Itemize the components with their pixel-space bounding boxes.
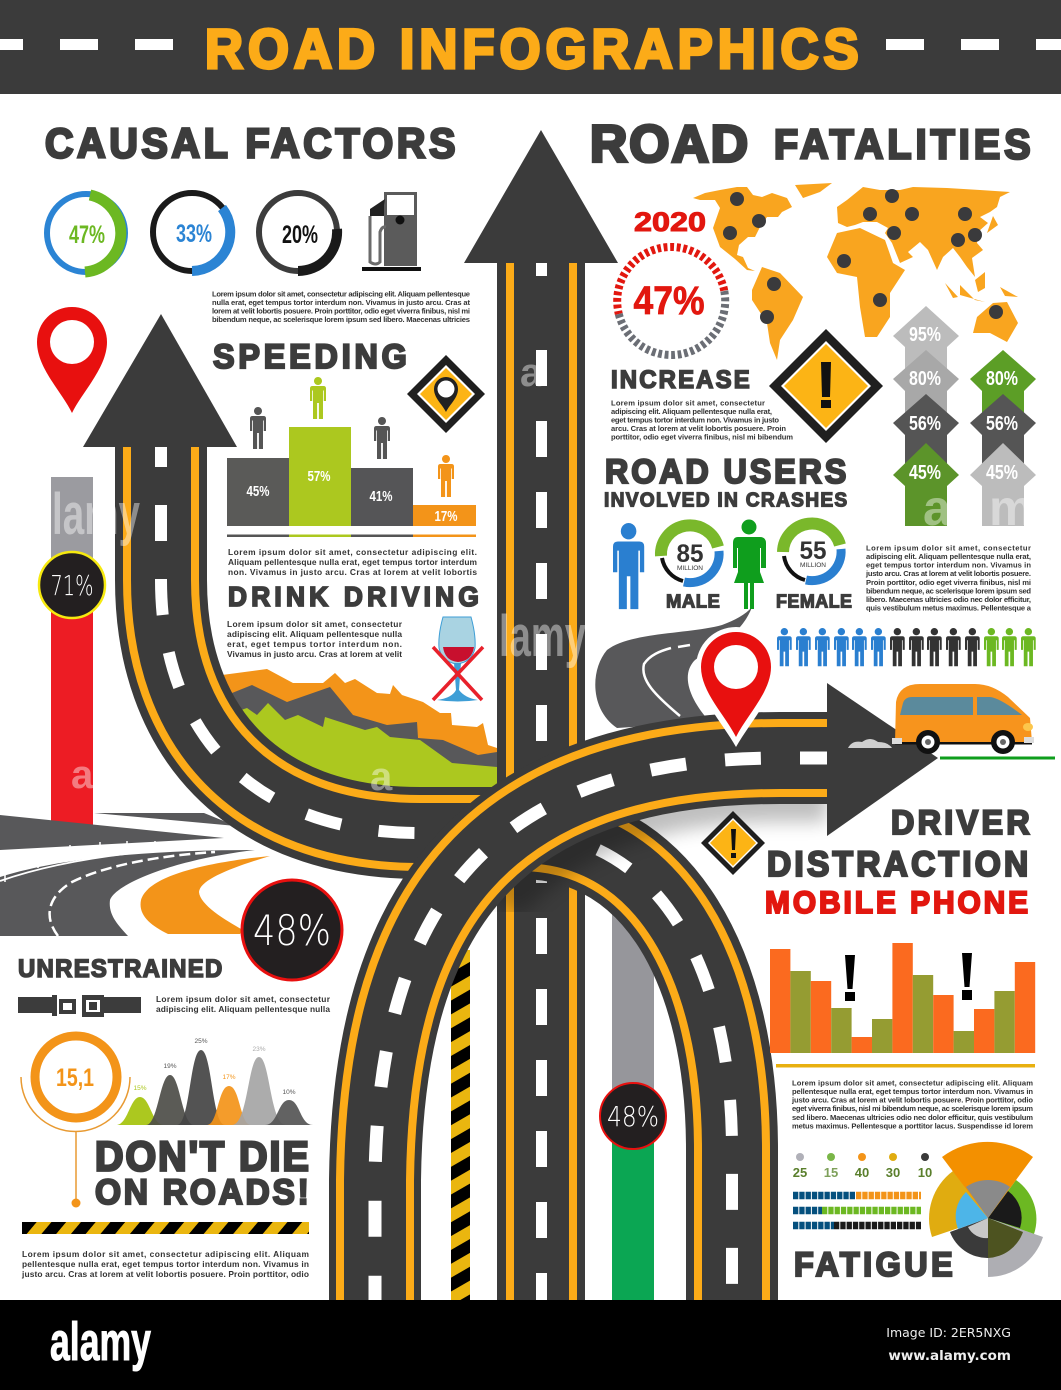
radial gauge: 47% bbox=[617, 247, 725, 355]
footer logo: alamy bbox=[50, 1312, 151, 1372]
text block: unrestrained bbox=[156, 994, 331, 1014]
text block: bottom left bbox=[21, 1249, 309, 1279]
icon: seat belt bbox=[18, 995, 141, 1017]
text block: speeding: Lorem ipsum dolor sit amet, consectetur adipiscing elit. bbox=[228, 547, 477, 557]
heading: road users bbox=[604, 453, 847, 512]
ring gauge: 15,1: 15,1 bbox=[56, 1064, 94, 1092]
heading: speeding: SPEEDING bbox=[213, 338, 407, 376]
heading: fatigue: FATIGUE bbox=[794, 1246, 953, 1284]
text block: causal factors: Lorem ipsum dolor sit amet, consectetur adipiscing elit. Aliquam pellentesque bbox=[212, 290, 470, 298]
peak chart: 15% bbox=[133, 1085, 147, 1092]
bar chart: speeding: 41% bbox=[370, 488, 392, 505]
peak chart: 19% bbox=[163, 1063, 177, 1070]
text block: bottom left: justo arcu. Cras at lorem at velit lobortis posuere. Proin porttitor, odio bbox=[21, 1269, 309, 1279]
sub-heading: mobile phone: MOBILE PHONE bbox=[765, 884, 1028, 920]
watermark letters bbox=[52, 351, 1047, 799]
legend: fatigue values: 15 bbox=[824, 1165, 838, 1180]
bar chart: speeding: 17% bbox=[434, 508, 458, 525]
heading: causal factors: CAUSAL FACTORS bbox=[45, 120, 455, 167]
text block: increase: arcu. Cras at lorem at velit lobortis posuere. Proin bbox=[611, 424, 786, 433]
icon: fuel pump bbox=[362, 192, 421, 271]
slogan: don't die on roads: DON'T DIE bbox=[95, 1133, 309, 1180]
donut: 47% bbox=[47, 194, 125, 272]
text block: driver distraction: sed libero. Maecenas ultricies odio nec dolor efficitur, quis vestibulum bbox=[792, 1113, 1033, 1122]
title: ROAD INFOGRAPHICS bbox=[205, 19, 859, 81]
peak chart: 17% bbox=[222, 1074, 236, 1081]
footer url: www.alamy.com bbox=[888, 1348, 1011, 1364]
text block: driver distraction: metus maximus. Pellentesque a porttitor lacus. Suspendisse id lorem bbox=[792, 1121, 1033, 1130]
watermark letters: a bbox=[71, 753, 94, 797]
text block: road users: eget tempus tortor interdum non. Vivamus in bbox=[866, 561, 1031, 570]
female gauge: 55 bbox=[800, 537, 827, 565]
orange road curve bbox=[141, 856, 270, 934]
icon: red pin with white outline bbox=[696, 627, 776, 747]
icon: male figure bbox=[613, 523, 644, 609]
text block: road users: Lorem ipsum dolor sit amet, consectetur bbox=[866, 544, 1031, 552]
text block: unrestrained: adipiscing elit. Aliquam pellentesque nulla bbox=[156, 1004, 330, 1014]
text block: driver distraction: eget viverra finibus, nisl mi bibendum neque, ac scelerisque lorem ipsum bbox=[792, 1104, 1033, 1113]
legend: fatigue values: 40 bbox=[855, 1165, 869, 1180]
polar chart: fatigue bbox=[929, 1142, 1043, 1277]
text block: causal factors bbox=[212, 290, 470, 324]
peak chart: 23% bbox=[252, 1046, 266, 1053]
landscape: hills bbox=[220, 669, 497, 790]
heading: driver distraction bbox=[765, 804, 1030, 920]
text block: drink driving: erat, eget tempus tortor interdum non. bbox=[227, 639, 402, 649]
segmented progress bars bbox=[793, 1196, 921, 1226]
text block: increase: adipiscing elit. Aliquam pellentesque nulla erat, bbox=[611, 407, 772, 416]
bar chart: speeding bbox=[227, 377, 476, 537]
text block: causal factors: lorem at velit lobortis posuere. Proin porttitor, odio eget viverra finibus, nisl mi bbox=[212, 306, 470, 316]
watermark letters: lamy bbox=[52, 482, 140, 547]
text block: causal factors: nulla erat, eget tempus tortor interdum non. Vivamus in justo arcu. Cras at bbox=[212, 298, 470, 307]
text block: increase: eget tempus tortor interdum non. Vivamus in justo bbox=[611, 416, 779, 424]
heading: road fatalities: ROAD bbox=[590, 114, 748, 172]
donut: 33% bbox=[153, 193, 231, 271]
text block: driver distraction bbox=[791, 1078, 1033, 1130]
text block: bottom left: Lorem ipsum dolor sit amet, consectetur adipiscing elit. Aliquam bbox=[22, 1249, 309, 1259]
slogan: don't die on roads: ON ROADS! bbox=[95, 1173, 309, 1212]
sub-heading: involved in crashes: INVOLVED IN CRASHES bbox=[604, 489, 847, 512]
arrow stack: column one bbox=[893, 306, 959, 526]
text block: causal factors: bibendum neque, ac scelerisque lorem ipsum sed libero. Maecenas ultricies bbox=[212, 315, 470, 324]
label: male: MALE bbox=[666, 590, 720, 611]
text block: road users: Proin porttitor, odio eget viverra finibus, nisl mi bbox=[866, 578, 1031, 587]
male gauge: 85 bbox=[676, 540, 704, 568]
arrow stack: column one: 56% bbox=[909, 413, 941, 435]
watermark letters: mi bbox=[989, 480, 1047, 536]
watermark letters: a bbox=[370, 755, 393, 799]
text block: road users: bibendum neque, ac scelerisque lorem ipsum sed bbox=[866, 586, 1031, 595]
heading: road users: ROAD USERS bbox=[605, 453, 846, 491]
header road banner bbox=[0, 0, 1061, 94]
text block: road users: libero. Maecenas ultricies odio nec dolor efficitur, bbox=[866, 595, 1031, 604]
arrow stack: column two: 45% bbox=[986, 462, 1018, 484]
gauge circle: 48% large bbox=[242, 880, 342, 980]
roadside highway scene bbox=[0, 813, 255, 936]
small background road bbox=[595, 607, 752, 728]
footer image id: Image ID: 2ER5NXG bbox=[886, 1325, 1011, 1340]
bar chart: driver distraction bbox=[770, 943, 1035, 1068]
footer band bbox=[0, 1300, 1061, 1390]
year 2020: 2020 bbox=[634, 207, 706, 237]
people row bbox=[777, 628, 1036, 666]
arrow stack: column one: 95% bbox=[909, 324, 941, 346]
donut: 20% bbox=[259, 193, 337, 271]
ring gauge: 15,1 bbox=[21, 1036, 130, 1208]
text block: speeding: non. Vivamus in justo arcu. Cras at lorem at velit lobortis bbox=[228, 567, 477, 577]
label: female: FEMALE bbox=[776, 590, 852, 612]
map markers bbox=[723, 189, 1003, 324]
arrow stack: column two bbox=[970, 350, 1036, 526]
arrow stack: column one: 45% bbox=[909, 462, 941, 484]
male gauge: MILLION bbox=[677, 565, 703, 572]
van with smoke bbox=[848, 684, 1055, 760]
text block: road users bbox=[865, 544, 1032, 612]
text block: driver distraction: justo arcu. Cras at lorem at velit lobortis posuere. Proin porttitor, odio bbox=[791, 1096, 1033, 1105]
icon: small warning sign bbox=[701, 811, 765, 875]
road shadow bbox=[490, 782, 827, 890]
legend: fatigue values: 10 bbox=[918, 1165, 932, 1180]
bar gauge: 71%: 71% bbox=[50, 569, 94, 602]
gauge circle: 48% large: 48% bbox=[253, 906, 331, 955]
bar gauge: 71% bbox=[39, 477, 105, 835]
arrow stack: column one: 80% bbox=[909, 368, 941, 390]
bar gauge: 48% bbox=[600, 900, 666, 1300]
text block: drink driving bbox=[227, 619, 403, 659]
male gauge bbox=[661, 525, 719, 583]
text block: drink driving: Vivamus in justo arcu. Cras at lorem at velit bbox=[227, 649, 402, 659]
text block: bottom left: pellentesque nulla erat, eget tempus tortor interdum non. Vivamus in bbox=[22, 1259, 309, 1269]
text block: speeding bbox=[228, 547, 477, 577]
text block: drink driving: Lorem ipsum dolor sit amet, consectetur bbox=[227, 619, 403, 629]
heading: increase: INCREASE bbox=[611, 367, 750, 394]
road: crossing arrow to the right bbox=[375, 683, 938, 1310]
radial gauge: 47%: 47% bbox=[634, 279, 704, 323]
heading: unrestrained: UNRESTRAINED bbox=[18, 956, 222, 983]
heading: driver distraction: DISTRACTION bbox=[767, 845, 1028, 884]
heading: road fatalities bbox=[590, 114, 1030, 172]
icon: no wine glass bbox=[433, 617, 483, 702]
watermark letters: a bbox=[923, 480, 952, 536]
female gauge: MILLION bbox=[800, 562, 826, 569]
female gauge bbox=[783, 524, 841, 581]
donut: 33%: 33% bbox=[176, 220, 212, 248]
text block: speeding: Aliquam pellentesque nulla erat, eget tempus tortor interdum bbox=[228, 557, 477, 567]
watermark letters: a bbox=[520, 351, 543, 395]
arrow stack: column two: 56% bbox=[986, 413, 1018, 435]
text block: increase: porttitor, odio eget viverra finibus, nisl mi bibendum bbox=[611, 432, 793, 442]
peak chart: 10% bbox=[282, 1089, 296, 1096]
peak chart bbox=[116, 1038, 313, 1125]
text block: increase bbox=[611, 398, 793, 442]
peak chart: 25% bbox=[194, 1038, 208, 1045]
arrow stack: column two: 80% bbox=[986, 368, 1018, 390]
icon: red location pin bbox=[37, 307, 107, 413]
bar chart: speeding: 45% bbox=[246, 483, 270, 500]
icon: pin road sign bbox=[407, 355, 485, 433]
text block: road users: justo arcu. Cras at lorem at velit lobortis posuere. bbox=[865, 569, 1031, 578]
donut: 20%: 20% bbox=[282, 221, 318, 249]
bar chart: speeding: 57% bbox=[308, 468, 330, 485]
legend: fatigue values bbox=[793, 1153, 932, 1180]
icon: female figure bbox=[733, 520, 766, 609]
bar gauge: 48%: 48% bbox=[607, 1100, 659, 1133]
road: left arrow curving to right arch bbox=[83, 314, 732, 1310]
heading: drink driving: DRINK DRIVING bbox=[228, 581, 479, 612]
text block: road users: quis vestibulum metus maximus. Pellentesque a bbox=[866, 604, 1032, 612]
icon: warning sign bbox=[769, 329, 883, 443]
legend: fatigue values: 30 bbox=[886, 1165, 900, 1180]
donut: 47%: 47% bbox=[69, 221, 105, 249]
slogan: don't die on roads bbox=[95, 1133, 309, 1212]
heading: driver distraction: DRIVER bbox=[891, 804, 1030, 842]
road: vertical arrow bbox=[464, 130, 618, 1300]
heading: road fatalities: FATALITIES bbox=[774, 121, 1031, 168]
text block: increase: Lorem ipsum dolor sit amet, consectetur bbox=[611, 398, 765, 408]
world map bbox=[693, 183, 1018, 360]
text block: road users: adipiscing elit. Aliquam pellentesque nulla erat, bbox=[866, 552, 1031, 561]
watermark letters: lamy bbox=[499, 604, 586, 669]
hazard stripe horizontal bbox=[22, 1222, 309, 1234]
hazard stripe vertical bbox=[451, 950, 470, 1300]
legend: fatigue values: 25 bbox=[793, 1165, 807, 1180]
text block: driver distraction: pellentesque nulla erat, eget tempus tortor interdum non. Vivamus in bbox=[792, 1087, 1033, 1096]
text block: driver distraction: Lorem ipsum dolor sit amet, consectetur adipiscing elit. Aliquam bbox=[792, 1078, 1033, 1088]
text block: drink driving: adipiscing elit. Aliquam pellentesque nulla bbox=[227, 629, 402, 639]
text block: unrestrained: Lorem ipsum dolor sit amet, consectetur bbox=[156, 994, 331, 1004]
